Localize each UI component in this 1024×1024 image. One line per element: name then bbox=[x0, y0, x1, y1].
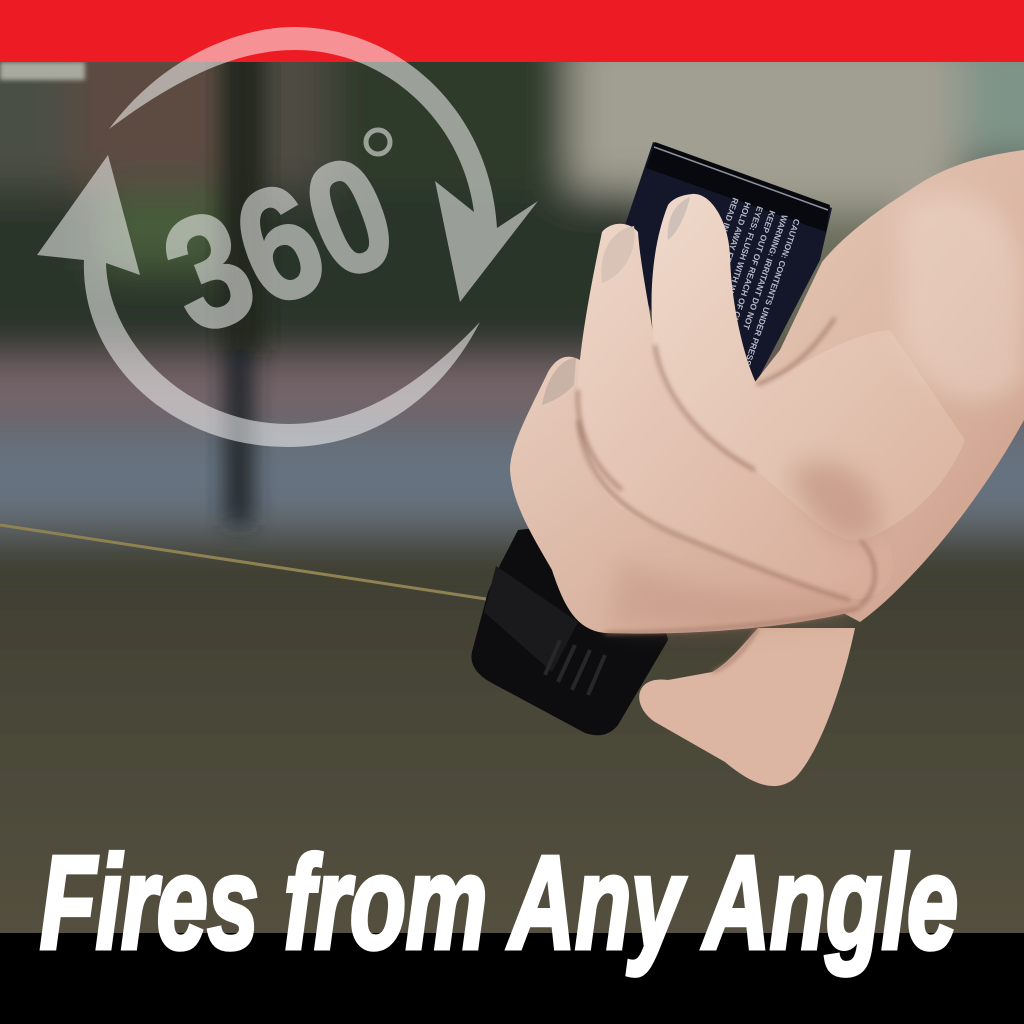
canister label text: EYES: FLUSH WITH WATER bbox=[719, 205, 765, 315]
index finger bbox=[652, 194, 965, 540]
lower finger bbox=[510, 357, 876, 634]
top arc arrow bbox=[109, 27, 538, 302]
nozzle base bbox=[471, 515, 668, 735]
canister body bbox=[620, 142, 832, 400]
black bottom band bbox=[0, 933, 1024, 1024]
canister bbox=[620, 142, 832, 400]
spray stream bbox=[0, 525, 486, 599]
thumb under bbox=[639, 628, 855, 786]
knuckle shadows bbox=[578, 318, 875, 672]
bottom arc arrow bbox=[37, 155, 480, 447]
middle fingernail bbox=[601, 226, 635, 283]
icon: 360 degree rotation arrows bbox=[37, 27, 538, 447]
canister label text: READ INSTRUCTIONS bbox=[702, 196, 741, 285]
hand bbox=[510, 150, 1024, 786]
red top band bbox=[0, 0, 1024, 62]
canister label text: HOLD AWAY FROM FACE bbox=[710, 201, 753, 301]
middle finger bbox=[577, 224, 893, 599]
degree ring bbox=[366, 130, 390, 154]
index fingernail bbox=[668, 197, 690, 240]
palm and wrist bbox=[660, 150, 1024, 622]
canister label text: WARNING: IRRITANT DO NOT bbox=[741, 213, 790, 332]
lower fingernail bbox=[542, 358, 576, 405]
canister label text: CAUTION: CONTENTS UNDER PRESSURE bbox=[736, 218, 802, 384]
canister label text bbox=[675, 196, 802, 384]
360 degree label: 360 bbox=[142, 120, 417, 368]
canister label text: KEEP OUT OF REACH OF CHILDREN bbox=[719, 209, 778, 355]
